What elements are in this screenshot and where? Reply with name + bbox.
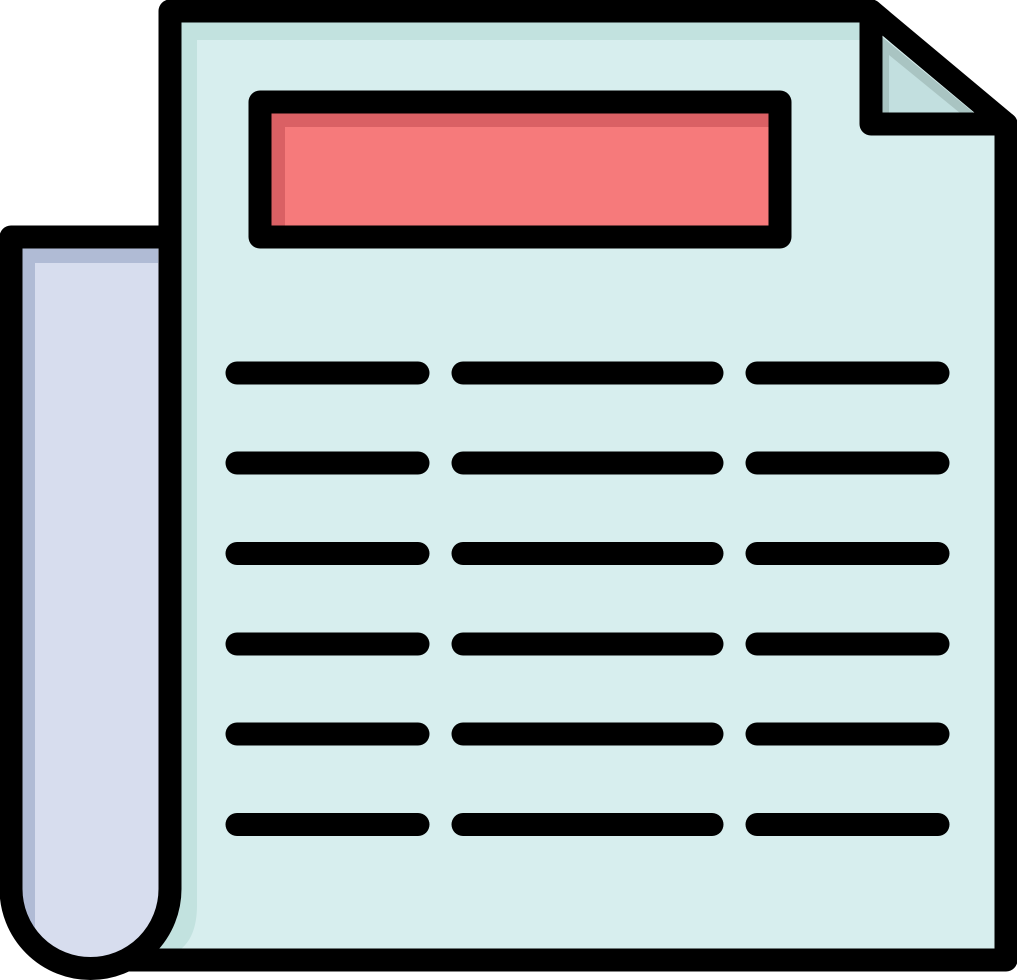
text lines: right column [757, 373, 938, 824]
icon: folded page corner [871, 11, 1006, 124]
headline box [260, 102, 780, 237]
panel: rolled left flap [11, 237, 170, 968]
text lines: left column [237, 373, 418, 824]
text lines: middle column [463, 373, 712, 824]
